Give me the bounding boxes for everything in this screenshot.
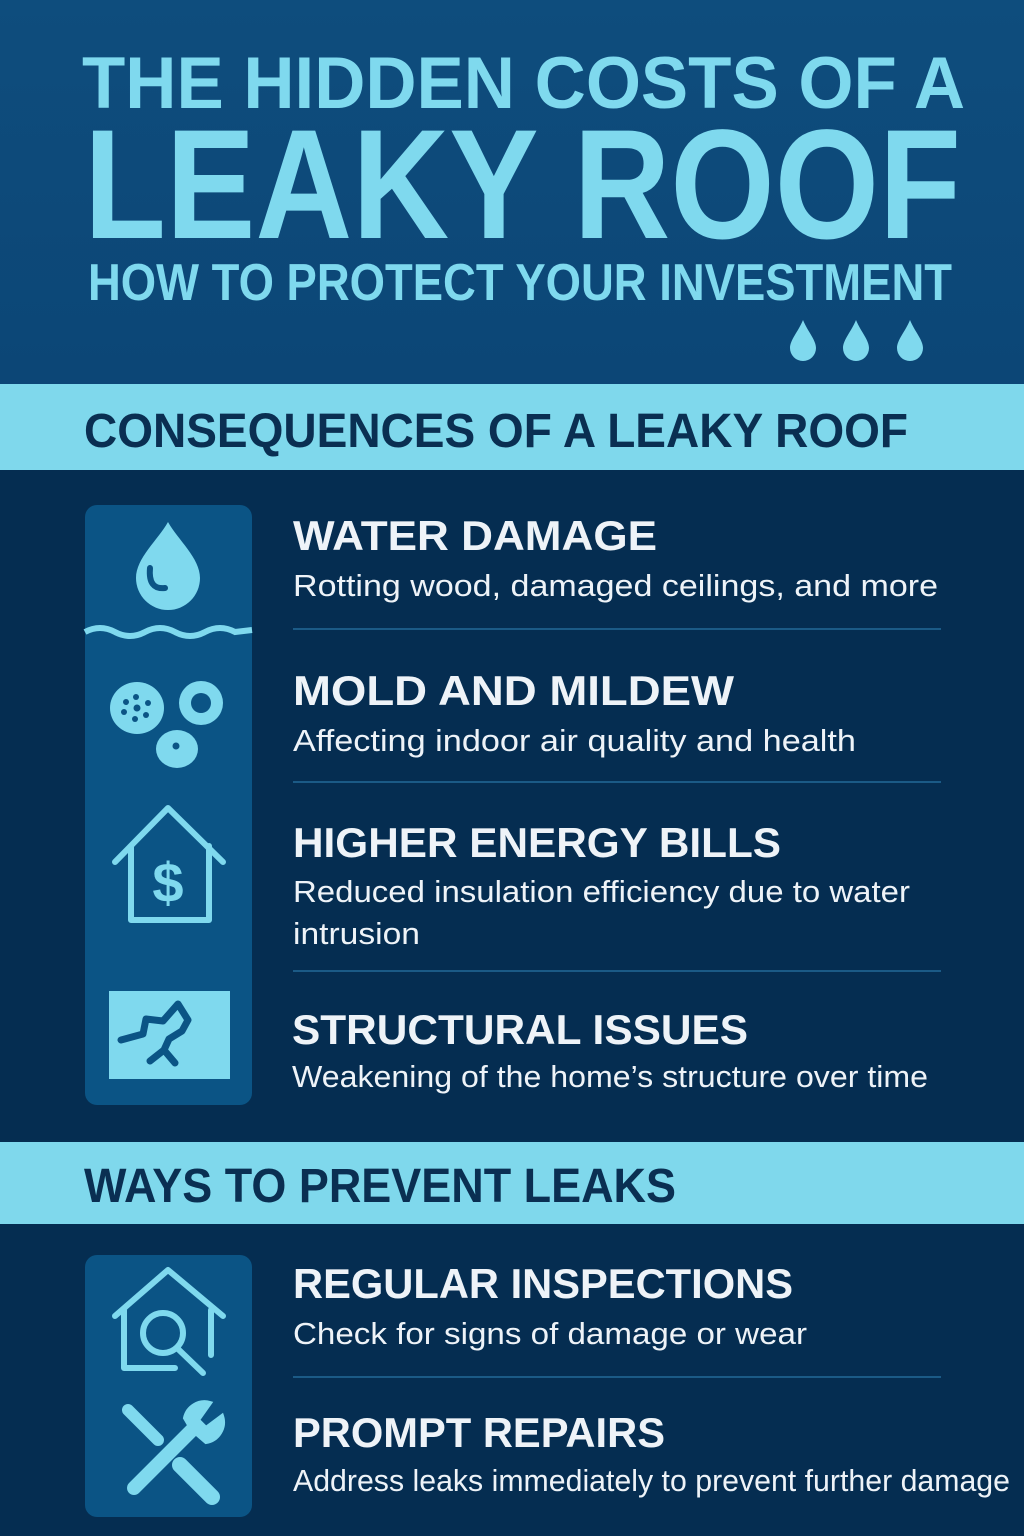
icon: water drops <box>790 320 923 361</box>
icon: tools <box>128 1402 223 1497</box>
item: structural issues: STRUCTURAL ISSUES <box>292 1006 748 1053</box>
item: regular inspections <box>293 1260 807 1351</box>
item: prompt repairs: PROMPT REPAIRS <box>293 1409 665 1456</box>
header <box>0 0 1024 384</box>
item: water damage: Rotting wood, damaged ceilings, and more <box>293 568 938 603</box>
item: mold and mildew: Affecting indoor air quality and health <box>293 723 856 758</box>
item: higher energy bills <box>293 819 910 951</box>
item: mold and mildew: MOLD AND MILDEW <box>293 667 734 714</box>
title line 1: THE HIDDEN COSTS OF A <box>82 43 965 124</box>
item: regular inspections: REGULAR INSPECTIONS <box>293 1260 793 1307</box>
icon: house with magnifier <box>115 1270 223 1373</box>
band: prevention heading: WAYS TO PREVENT LEAKS <box>84 1160 676 1213</box>
item: prompt repairs <box>293 1409 1010 1498</box>
icon: house with dollar <box>115 808 223 920</box>
band: consequences heading <box>0 384 1024 470</box>
band: consequences heading: CONSEQUENCES OF A LEAKY ROOF <box>84 405 908 458</box>
panel: consequence icons <box>85 505 252 1105</box>
item: structural issues: Weakening of the home’s structure over time <box>292 1059 928 1094</box>
icon: cracked wall <box>109 991 230 1079</box>
item: regular inspections: Check for signs of damage or wear <box>293 1316 807 1351</box>
item: structural issues <box>292 1006 928 1094</box>
band: prevention heading <box>0 1142 1024 1224</box>
panel: prevention icons <box>85 1255 252 1517</box>
icon: mold spores <box>110 681 223 768</box>
item: higher energy bills: Reduced insulation efficiency due to water <box>293 874 910 909</box>
item: water damage <box>293 512 938 603</box>
item: mold and mildew <box>293 667 856 758</box>
item: prompt repairs: Address leaks immediately to prevent further damage <box>293 1463 1010 1498</box>
item: water damage: WATER DAMAGE <box>293 512 657 559</box>
item: higher energy bills: HIGHER ENERGY BILLS <box>293 819 781 866</box>
icon: water drop <box>85 522 252 636</box>
icon: house with dollar: $ <box>152 851 184 914</box>
item: higher energy bills: intrusion <box>293 916 420 951</box>
